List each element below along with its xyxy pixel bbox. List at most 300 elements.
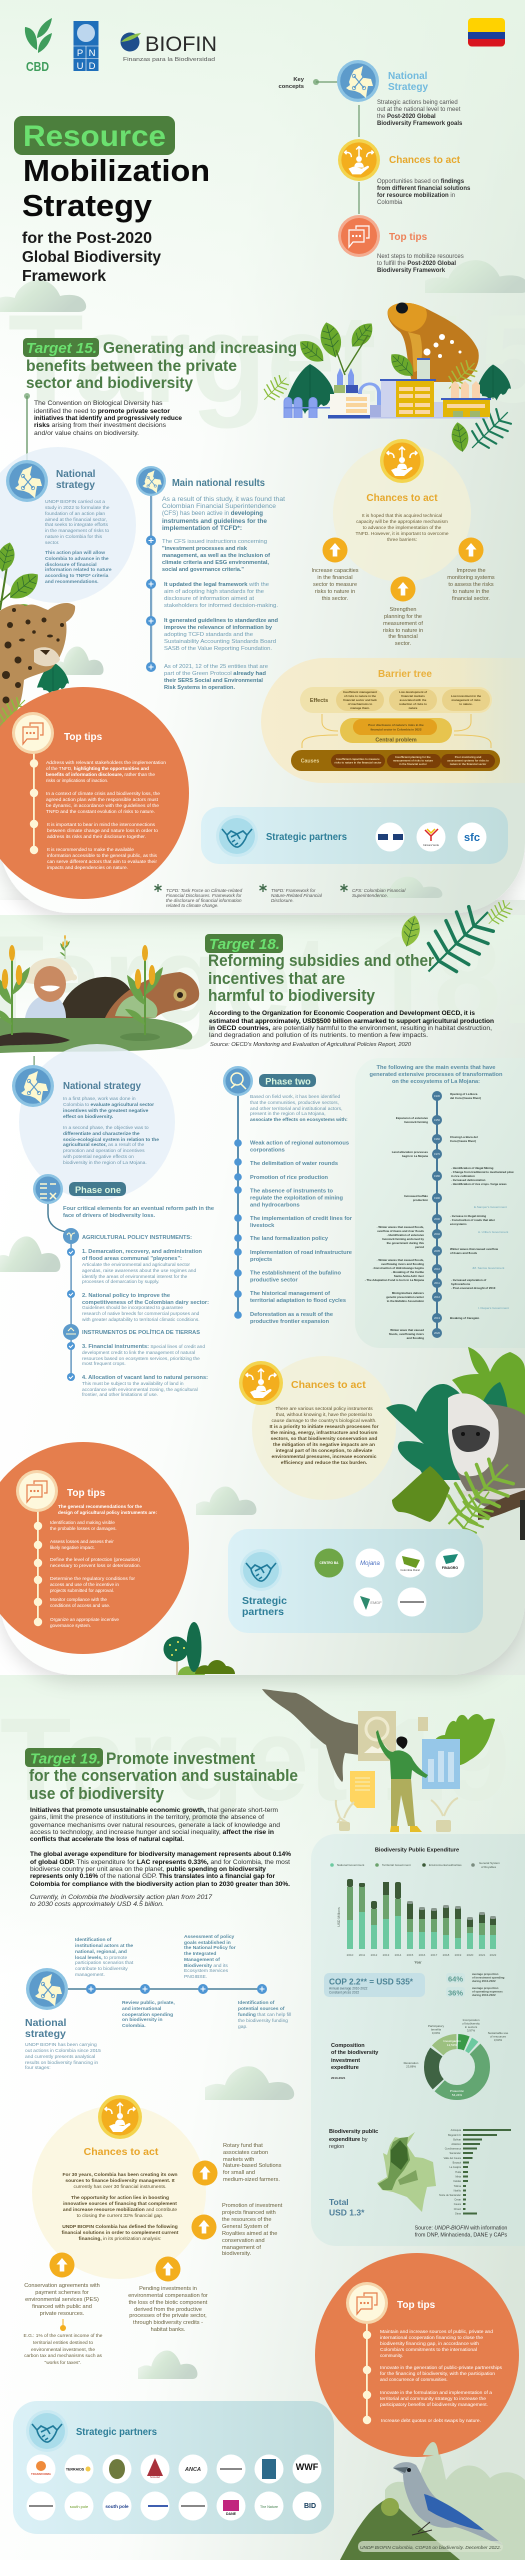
donut chart: composition: expediture — [331, 2065, 359, 2071]
panel: phase one: resources based on ecosystem services, prioritizing the — [82, 1356, 200, 1362]
footnotes — [154, 884, 406, 908]
panel: chances to act target 19: Royalties aimed at the — [222, 2231, 277, 2237]
donut chart: composition: benefits — [431, 2028, 442, 2032]
panel: barrier tree: Poor disclosure of nature's risks in the — [368, 723, 424, 727]
map and bars: expenditure by region: Bolívar — [453, 2138, 461, 2142]
panel: orange top tips target 18: Top tips — [67, 1488, 106, 1499]
panel: main national results: their SERS Social and Environmental — [164, 678, 263, 684]
stacked bar chart: Year — [414, 1960, 422, 1964]
heading: target 18: Reforming subsidies and other — [208, 952, 435, 970]
panel: phase two: corporations — [250, 1148, 285, 1154]
key concepts legend: Top tips — [389, 232, 428, 243]
illustration: farmer, frog and corn — [0, 935, 199, 1053]
COP callout: average proportion — [472, 1972, 499, 1976]
key concepts legend: Biodiversity Framework goals — [377, 121, 463, 127]
panel: strategic partners target 18 — [228, 1529, 483, 1633]
title: for the Post-2020 — [22, 230, 152, 247]
stacked bar chart: 2014 — [395, 1953, 402, 1957]
panel: chances to act target 18: cause damage to the country's biological wealth. — [271, 1418, 377, 1424]
panel: orange top tips target 15: It is recommended to make the available — [47, 847, 135, 852]
panel: target 18 section — [0, 900, 525, 1675]
panel: La Mojana timeline: - Increase in illegal mining — [450, 1214, 486, 1218]
panel: orange top tips target 19: community. — [380, 2353, 403, 2358]
chart legend: General System — [479, 1861, 500, 1865]
panel: barrier tree: Central problem — [375, 738, 417, 744]
chart legend: of Royalties — [481, 1865, 497, 1869]
panel: chances to act target 15: monitoring systems — [447, 575, 495, 581]
panel: La Mojana timeline: 2000 — [434, 1217, 440, 1221]
panel: La Mojana timeline: Winter wave that caused — [390, 1328, 424, 1332]
panel: strategic partners target 19: south pole — [105, 2504, 129, 2509]
panel: chances to act target 18: It is a priority to initiate research processes for — [270, 1424, 379, 1430]
footnotes: Disclosure. — [271, 898, 294, 903]
panel: strategic partners target 18: Colombia Rural — [400, 1568, 420, 1572]
donut chart: composition: of the biodiversity — [331, 2050, 379, 2056]
panel: phase two: The delimitation of water rounds — [250, 1161, 338, 1167]
panel: chances to act target 19 — [24, 2095, 283, 2366]
panel: national strategy target 15: Colombia to advance in the — [45, 556, 109, 562]
panel: strategic partners target 18: FINAGRO — [442, 1566, 458, 1570]
illustration: cotton-top tamarin with leaves — [386, 1347, 525, 1540]
panel: orange top tips target 18: Organize an appropriate incentive — [50, 1617, 119, 1622]
logo: PNUD: U — [77, 61, 84, 72]
panel: main national results: (CFS) has been active in developing — [162, 510, 263, 517]
logo: BIOFIN: Finanzas para la Biodiversidad — [123, 57, 215, 63]
panel: barrier tree: reduction of risks to — [399, 702, 427, 706]
panel: orange top tips target 19: Innovate in the formulation and implementation of a — [380, 2390, 492, 2395]
panel: La Mojana timeline: 2012 — [434, 1295, 440, 1299]
footnotes: TNFD: Framework for — [271, 888, 316, 893]
panel: strategic partners target 19 — [13, 2401, 334, 2534]
panel: La Mojana timeline: Expansion of extensive — [396, 1116, 428, 1120]
panel: chances to act target 19: Rotary fund that — [223, 2143, 263, 2149]
logo: BIOFIN — [120, 32, 217, 63]
panel: chances to act target 18 — [239, 1356, 396, 1500]
map and bars: expenditure by region: Nariño — [454, 2190, 462, 2192]
panel: national strategy target 18: socio-ecological system in relation to the — [63, 1137, 159, 1143]
panel: phase one: 1. Demarcation, recovery, and administration — [82, 1249, 203, 1255]
panel: chances to act target 18: integral part of its conception, to alleviate — [276, 1448, 373, 1454]
panel: phase one: development credit to link the management of natural — [82, 1350, 195, 1356]
panel: La Mojana timeline: Breaking of Caregato — [450, 1316, 479, 1320]
intro text: target 19: The global average expenditure for biodiversity management represents about 0.14% — [30, 1851, 292, 1858]
panel: orange top tips target 15 — [0, 687, 189, 899]
key concepts legend: Opportunities based on findings — [377, 179, 465, 185]
panel: chances to act target 15: to assess the risks — [448, 582, 494, 588]
panel: La Mojana timeline: 1990 — [434, 1196, 440, 1200]
key concepts legend: for resource mobilization in — [377, 193, 455, 199]
panel: main national results: social and governance criteria." — [162, 567, 244, 573]
panel: national strategy target 19: national, regional, and — [75, 1949, 127, 1955]
panel: phase two: livestock — [250, 1223, 275, 1229]
panel: chances to act target 19: environmental investment, the — [31, 2347, 95, 2353]
panel: La Mojana timeline: 2011 — [434, 1281, 440, 1285]
map and bars: expenditure by region: Otras — [455, 2212, 462, 2216]
intro text: target 19: conflicts that accelerate the loss of natural capital. — [30, 1836, 184, 1843]
panel: chances to act target 19: management of — [222, 2245, 261, 2251]
map and bars: expenditure by region: Cauca — [454, 2203, 462, 2206]
panel: chances to act target 15: measurement of — [383, 621, 423, 627]
panel: La Mojana timeline: 1930 — [434, 1094, 440, 1098]
panel: La Mojana timeline: livestock farming — [404, 1120, 428, 1124]
panel: La Mojana timeline: Opening of La Boca — [450, 1092, 478, 1096]
panel: chances to act target 19: currently has over 30 financial instruments. — [74, 2184, 166, 2190]
panel: La Mojana timeline: 2010 — [434, 1267, 440, 1271]
COP callout: Constant prices 2022 — [329, 1990, 359, 1994]
panel: orange top tips target 15: address its risks and their disclosure together. — [47, 834, 146, 839]
map and bars: expenditure by region: Antioquia — [451, 2129, 462, 2132]
intro text: target 19: to 2030 costs approximately USD 4.5 billion. — [30, 1901, 164, 1908]
panel: chances to act target 15: Strengthen — [390, 607, 416, 613]
heading: target 15: Generating and increasing — [103, 340, 297, 357]
panel: main national results: As of 2021, 12 of the 25 entities that are — [164, 664, 268, 670]
stacked bar chart: 2015 — [407, 1953, 414, 1957]
panel: national strategy target 18: differentiate and characterize the — [63, 1131, 140, 1137]
heading: target 19: Promote investment — [106, 1750, 255, 1768]
donut chart: composition: Investigación — [443, 2039, 461, 2043]
source note: Source: UNDP-BIOFIN with information — [415, 2226, 507, 2232]
panel: chances to act target 19: for small and — [223, 2170, 255, 2176]
donut chart: composition: 0,00% — [432, 2031, 441, 2035]
key concepts legend: Biodiversity Framework — [377, 268, 446, 274]
panel: La Mojana timeline: The following are the main events that have — [376, 1065, 496, 1071]
panel: La Mojana timeline: -Construction of Hidroituango begins — [373, 1266, 424, 1270]
panel: national strategy target 18: with potential negative effects on — [63, 1154, 134, 1160]
panel: national strategy target 19: Review public, private, — [122, 2000, 175, 2006]
panel: barrier tree: financial sector in Colombia in 2022 — [370, 728, 422, 732]
panel: national strategy target 19: Management of — [184, 1957, 220, 1963]
donut chart: composition: 54,24% — [452, 2093, 462, 2097]
panel: orange top tips target 19: and concurrence of communities. — [380, 2377, 448, 2382]
credit line — [358, 2541, 503, 2552]
panel: chances to act target 19: UNDP BIOFIN Colombia has defined the following — [62, 2224, 178, 2230]
panel: La Mojana timeline: 1980 — [434, 1174, 440, 1178]
COP callout: average proportion — [472, 1986, 499, 1990]
chart legend: Environmental authorities — [429, 1863, 462, 1867]
panel: La Mojana timeline: A. Uribe's Government — [478, 1230, 508, 1234]
panel: national strategy target 19: the Integrated — [184, 1951, 216, 1957]
stacked bar chart: 2019 — [455, 1953, 462, 1957]
COP callout: during 2010-2022 — [472, 1979, 496, 1983]
COP callout: Annual average 2010-2022 — [329, 1986, 368, 1990]
panel: barrier tree: Low development of — [399, 690, 427, 694]
intro text: target 15: initiatives that identify and progressively reduce — [34, 415, 182, 422]
donut chart: composition: Sustainable use — [488, 2031, 509, 2035]
panel: national strategy target 15: aimed at the financial sector, — [45, 517, 107, 523]
panel: main national results: Colombian Financial Superintendence — [162, 503, 277, 510]
panel: phase one: AGRICULTURAL POLICY INSTRUMENTS: — [82, 1235, 192, 1241]
panel: national strategy target 19: the National Policy for — [184, 1945, 236, 1951]
panel: national strategy target 15: and recommendations. — [45, 579, 99, 585]
key concepts legend: Strategy — [388, 82, 428, 93]
panel: national strategy target 19: and international — [122, 2006, 162, 2012]
intro text: target 18 — [209, 1010, 494, 1048]
flag: Colombia — [468, 18, 505, 46]
panel: national strategy target 19: management. — [75, 1972, 105, 1978]
panel: phase one: INSTRUMENTOS DE POLÍTICA DE TIERRAS — [82, 1328, 200, 1336]
COP callout: 36% — [448, 1988, 463, 1998]
panel: La Mojana timeline: genetic preservation center — [386, 1295, 425, 1299]
panel: orange top tips target 18: Assess losses and assess their — [50, 1539, 114, 1544]
panel: phase one: Articulate the environmental and agricultural sector — [82, 1262, 190, 1268]
panel: national strategy target 15: in the management of risks to — [45, 528, 109, 534]
panel: main national results: It updated the legal framework with the — [164, 582, 269, 588]
panel: strategic partners target 19: Sociedad — [150, 2476, 161, 2479]
title: Global Biodiversity — [22, 249, 161, 266]
panel: phase two: Promotion of rice production — [250, 1175, 329, 1181]
panel: national strategy target 19: Ecosystem Services — [184, 1968, 229, 1974]
map and bars: expenditure by region: expenditure by — [329, 2137, 368, 2143]
credit line: UNDP BIOFIN Colombia, COP15 on biodiversity. December 2022. — [360, 2545, 501, 2551]
panel: barrier tree: Causes — [301, 758, 319, 764]
panel: chances to act target 19: Chances to act — [84, 2146, 159, 2158]
panel: chances to act target 19: Conservation agreements with — [24, 2283, 100, 2289]
panel: main national results: implementation of TCFD*: — [162, 525, 242, 532]
panel: phase one: Four critical elements for an eventual reform path in the — [63, 1206, 214, 1212]
panel: strategic partners target 18: Strategic — [242, 1595, 287, 1607]
panel: La Mojana timeline: - Change from traditional to mechanized plow — [451, 1170, 514, 1174]
panel: chances to act target 18: environmental pressures, increase economic — [272, 1454, 377, 1460]
panel: La Mojana timeline: on the ecosystems of La Mojana: — [392, 1079, 480, 1085]
panel: orange top tips target 15: benefits of information disclosure, rather than the — [46, 772, 156, 777]
panel: orange top tips target 18: likely negative impact. — [50, 1545, 95, 1550]
panel: phase one: Guidelines should be incorporated to guarantee — [82, 1305, 183, 1311]
panel: national strategy target 19: Identification of — [238, 2000, 275, 2006]
panel: La Mojana timeline: generated extensive processes of transformation — [370, 1072, 503, 1078]
panel: chances to act target 19: "works for taxes". — [44, 2360, 82, 2366]
illustration: trees and bushes — [164, 1622, 235, 1675]
panel: orange top tips target 19: participatory benefits of biodiversity management. — [380, 2402, 488, 2407]
panel: national strategy target 15 — [0, 447, 136, 603]
map and bars: expenditure by region — [329, 2129, 511, 2218]
panel: barrier tree: Insufficient management — [343, 690, 377, 694]
source note — [415, 2226, 508, 2238]
panel: strategic partners target 15 — [201, 807, 508, 864]
panel: national strategy target 19: Biodiversity and its — [184, 1963, 228, 1969]
panel: La Mojana timeline: begin in La Mojana — [402, 1154, 428, 1158]
key concepts legend: the Post-2020 Global — [377, 114, 436, 120]
panel: orange top tips target 18: governance system. — [50, 1623, 91, 1628]
COP callout: of operating expenses — [472, 1990, 503, 1994]
panel: strategic partners target 18: partners — [242, 1606, 284, 1618]
panel: La Mojana timeline: Increased buffalo — [404, 1194, 428, 1198]
heading: target 18: harmful to biodiversity — [208, 987, 376, 1005]
intro text: target 18: in OECD countries, are potentially harmful to the environment, resulting in habitat destruction, — [209, 1025, 492, 1032]
panel: La Mojana timeline: - Construction of roads that alter — [450, 1218, 496, 1222]
heading: target 15: Target 15. — [26, 340, 97, 357]
panel: national strategy target 18: effect on biodiversity. — [63, 1114, 114, 1120]
panel: national strategy target 18: Colombia to evaluate agricultural sector — [63, 1102, 154, 1108]
panel: orange top tips target 19: territorial and community strategy to increase the — [380, 2396, 486, 2401]
panel: main national results: part of the Green Protocol already had — [164, 671, 267, 677]
panel: chances to act target 18: the mining, energy, infrastructure and tourism — [271, 1430, 378, 1436]
logo: CBD — [25, 18, 52, 74]
panel: national strategy target 19 — [25, 1934, 291, 2071]
title — [14, 116, 210, 285]
panel: phase one: identify the areas of environmental interest for the — [82, 1274, 188, 1280]
footnotes: Financial Disclosures. Framework for — [166, 893, 242, 898]
panel: chances to act target 19: Pending investments in — [139, 2286, 197, 2292]
panel: strategic partners target 18: CENTRO BA — [320, 1561, 339, 1565]
panel: national strategy target 19: cooperation spending — [122, 2012, 173, 2018]
stacked bar chart: 2011 — [359, 1953, 366, 1957]
map and bars: expenditure by region: Meta — [455, 2176, 462, 2178]
panel: national strategy target 19: and currently presents analytical — [25, 2054, 95, 2060]
panel: La Mojana timeline: - Breaking of the Caribe — [391, 1270, 424, 1274]
stacked bar chart: 2016 — [419, 1953, 426, 1957]
panel: orange top tips target 15: between climate change and nature loss in order to — [47, 828, 159, 833]
panel: barrier tree: Barrier tree — [378, 669, 432, 680]
donut chart: composition: Restoration — [404, 2061, 419, 2065]
panel: national strategy target 19: National — [25, 2017, 67, 2029]
donut chart: composition: 3,97% — [467, 2028, 476, 2032]
intro text: target 18: land degradation and pollution of its nutrients. to mention a few impacts. — [209, 1032, 428, 1039]
panel: chances to act target 19: private resources. — [40, 2311, 85, 2317]
stacked bar chart: USD Millions — [337, 1907, 341, 1927]
panel: chances to act target 15: sector to measure — [313, 582, 357, 588]
panel: phase one: frontier, and other limitations of use. — [82, 1392, 158, 1398]
panel: barrier tree: nature in the financial sector — [450, 762, 486, 766]
leaves at the section boundary — [398, 901, 512, 972]
panel: orange top tips target 18: necessary to prevent loss or deterioration. — [50, 1563, 141, 1568]
panel: phase two — [223, 1066, 353, 1325]
panel: national strategy target 19: PNGIBSE. — [184, 1974, 207, 1980]
footnotes: TCFD: Task Force on Climate-related — [166, 888, 243, 893]
intro text: target 19: Initiatives that promote unsustainable economic growth, that generate short-term — [30, 1807, 278, 1814]
panel: chances to act target 19: environmental compensation for — [128, 2293, 208, 2299]
panel: national strategy target 18: In a first phase, work was done in — [63, 1096, 136, 1102]
panel: chances to act target 19: financial solutions in order to complement current — [62, 2230, 179, 2236]
panel: target 15 section — [0, 0, 525, 913]
map and bars: expenditure by region: Tolima — [454, 2185, 462, 2188]
panel: biodiversity expenditure charts — [311, 1834, 525, 2246]
panel: main national results: disclosure of information aimed at — [164, 596, 254, 602]
panel: national strategy target 19: results on biodiversity financing in — [25, 2060, 98, 2066]
panel: main national results: instruments and guidelines for the — [162, 518, 268, 525]
panel: national strategy target 19: funding that can help fill — [238, 2012, 291, 2018]
intro text: target 19: represents only 0.16% of the national GDP. This translates into a financial gap for — [30, 1873, 276, 1880]
panel: La Mojana timeline: 2013 — [434, 1316, 440, 1320]
panel: national strategy target 15: National — [56, 469, 96, 480]
panel: chances to act target 19: territorial entities destined to — [33, 2340, 93, 2346]
panel: chances to act target 18: Chances to act — [291, 1379, 366, 1391]
panel: orange top tips target 15: It is important to bear in mind the interconnections — [47, 822, 156, 827]
panel: La Mojana timeline: hydrocarbons — [451, 1282, 471, 1286]
panel: chances to act target 19: the loss of the biotic component — [129, 2300, 208, 2306]
panel: phase two: productive frontier expansion — [250, 1319, 330, 1325]
panel: chances to act target 15: capacity will be the appropriate mechanism — [356, 519, 448, 525]
panel: La Mojana timeline: overflow of ilsans and river floods — [377, 1229, 424, 1233]
heading: target 19 — [25, 1748, 298, 1803]
panel: chances to act target 19: General System of — [222, 2224, 269, 2230]
panel: national strategy target 18: agricultural sector, as a result of the — [63, 1142, 145, 1148]
panel: orange top tips target 19: Innovate in the generation of public-private partnerships — [380, 2365, 503, 2370]
panel: chances to act target 19: conservation and — [222, 2238, 265, 2244]
panel: national strategy target 19: on biodiversity in — [122, 2017, 163, 2023]
key concepts legend: concepts — [279, 84, 304, 90]
panel: strategic partners target 18: EMDF — [370, 1600, 382, 1605]
panel: orange top tips target 18: Identification and making visible — [50, 1520, 115, 1525]
panel: orange top tips target 15: risks or implications of inaction. — [46, 778, 108, 783]
source note: from DNP, Minhacienda, DANE y CAPs — [415, 2232, 508, 2238]
panel: barrier tree: Insufficient planning for the — [395, 755, 431, 759]
panel: chances to act target 15: financial sector. — [452, 596, 490, 602]
panel: La Mojana timeline: I. Duque's Government — [478, 1306, 509, 1310]
panel: chances to act target 15: to advance the implementation of the — [363, 525, 442, 531]
panel: La Mojana timeline — [355, 1058, 525, 1348]
panel: La Mojana timeline: 1970 — [434, 1152, 440, 1156]
map and bars: expenditure by region: Cesar — [454, 2198, 461, 2202]
chart legend — [330, 1861, 500, 1869]
map and bars: expenditure by region: Valle del Cauca — [444, 2157, 462, 2160]
panel: chances to act target 19: The opportunity for action lies in boosting — [71, 2195, 169, 2201]
map and bars: expenditure by region: Caldas — [453, 2180, 462, 2183]
panel: orange top tips target 18: Determine the regulatory conditions for — [50, 1576, 136, 1581]
panel: national strategy target 18: incentives with the greatest negative — [63, 1108, 149, 1114]
illustration: tanager bird on leaf — [340, 2462, 503, 2560]
panel: national strategy target 18: biodiversity in the region of La Mojana. — [63, 1160, 147, 1166]
panel: chances to act target 19: biodiversity. — [222, 2251, 252, 2257]
panel: chances to act target 19: For 30 years, Colombia has been creating its own — [63, 2172, 177, 2178]
panel: chances to act target 19: innovative sources of financing that complement — [63, 2201, 177, 2207]
footnotes: CFS: Colombian Financial — [352, 888, 406, 893]
panel: La Mojana timeline: - Post-coecured drought of 2010 — [451, 1286, 496, 1290]
map and bars: expenditure by region: Atlántico — [451, 2143, 462, 2146]
panel: orange top tips target 19: biodiversity financing gap, in accordance with — [380, 2341, 479, 2346]
intro text: target 18: Source: OECD's Monitoring and Evaluation of Agricultural Policies Report, 2020 — [210, 1042, 411, 1048]
panel: chances to act target 18: efficiency and reduce the tax burden. — [281, 1460, 368, 1466]
footnotes: related to climate change. — [166, 903, 219, 908]
map and bars: expenditure by region: Norte de Santander — [439, 2194, 461, 2197]
panel: chances to act target 19: carbon tax and mechanisms such as — [24, 2353, 103, 2359]
key concepts legend: Chances to act — [389, 155, 461, 166]
intro text: target 18: According to the Organization for Economic Cooperation and Development OECD, it is — [209, 1010, 476, 1017]
panel: main national results: "investment processes and risk — [162, 546, 248, 552]
donut chart: composition: Participatory — [428, 2024, 445, 2028]
panel: national strategy target 19: Assessment of policy — [184, 1934, 235, 1940]
panel: phase two: The historical management of — [250, 1291, 330, 1297]
map and bars: expenditure by region: La Guajira — [449, 2166, 462, 2169]
panel: strategic partners target 19: TERRAIDS — [66, 2468, 85, 2472]
intro text: target 18: estimated that approximately, USD$500 billion earmarked to support agricultural production — [209, 1018, 494, 1025]
panel: chances to act target 19: to closing the current 32% financial gap. — [77, 2213, 163, 2219]
panel: barrier tree: nature — [409, 706, 418, 710]
panel: national strategy target 15: foundation of an action plan — [45, 511, 105, 517]
panel: barrier tree: of risks to nature in the — [344, 694, 376, 698]
panel: orange top tips target 18: Monitor compliance with the — [50, 1597, 107, 1602]
panel: national strategy target 19: contribute to biodiversity — [75, 1966, 128, 1972]
donut chart: composition: Incorporation — [463, 2018, 480, 2022]
panel: orange top tips target 19: Maintain and increase sources of public, private and — [380, 2329, 493, 2334]
panel: phase two: present in the region of La Mojana, — [250, 1111, 326, 1117]
panel: phase two: associate the effects on ecosystems with: — [250, 1117, 348, 1123]
panel: national strategy target 15: sector. — [45, 540, 59, 546]
panel: La Mojana timeline: Land allocation processes — [392, 1150, 428, 1154]
panel: La Mojana timeline: - Increased deforestation — [451, 1178, 486, 1182]
panel: orange top tips target 15: can serve different actors that aim to evaluate their — [47, 859, 158, 864]
panel: La Mojana timeline: period — [415, 1245, 424, 1249]
panel: target 19 section — [0, 1600, 525, 2560]
panel: La Mojana timeline: and flooding — [407, 1336, 424, 1340]
COP callout — [324, 1972, 505, 1998]
logo: PNUD — [74, 21, 98, 72]
panel: phase one: of flood areas communal "playones": — [82, 1256, 182, 1262]
COP callout: of investment spending — [472, 1976, 505, 1980]
panel: orange top tips target 19: international cooperation financing to close the — [380, 2335, 483, 2340]
panel: phase one: face of drivers of biodiversity loss. — [63, 1213, 155, 1219]
panel: La Mojana timeline: Cura (Cauca River) — [450, 1139, 476, 1143]
panel: barrier tree: Effects — [310, 698, 328, 704]
